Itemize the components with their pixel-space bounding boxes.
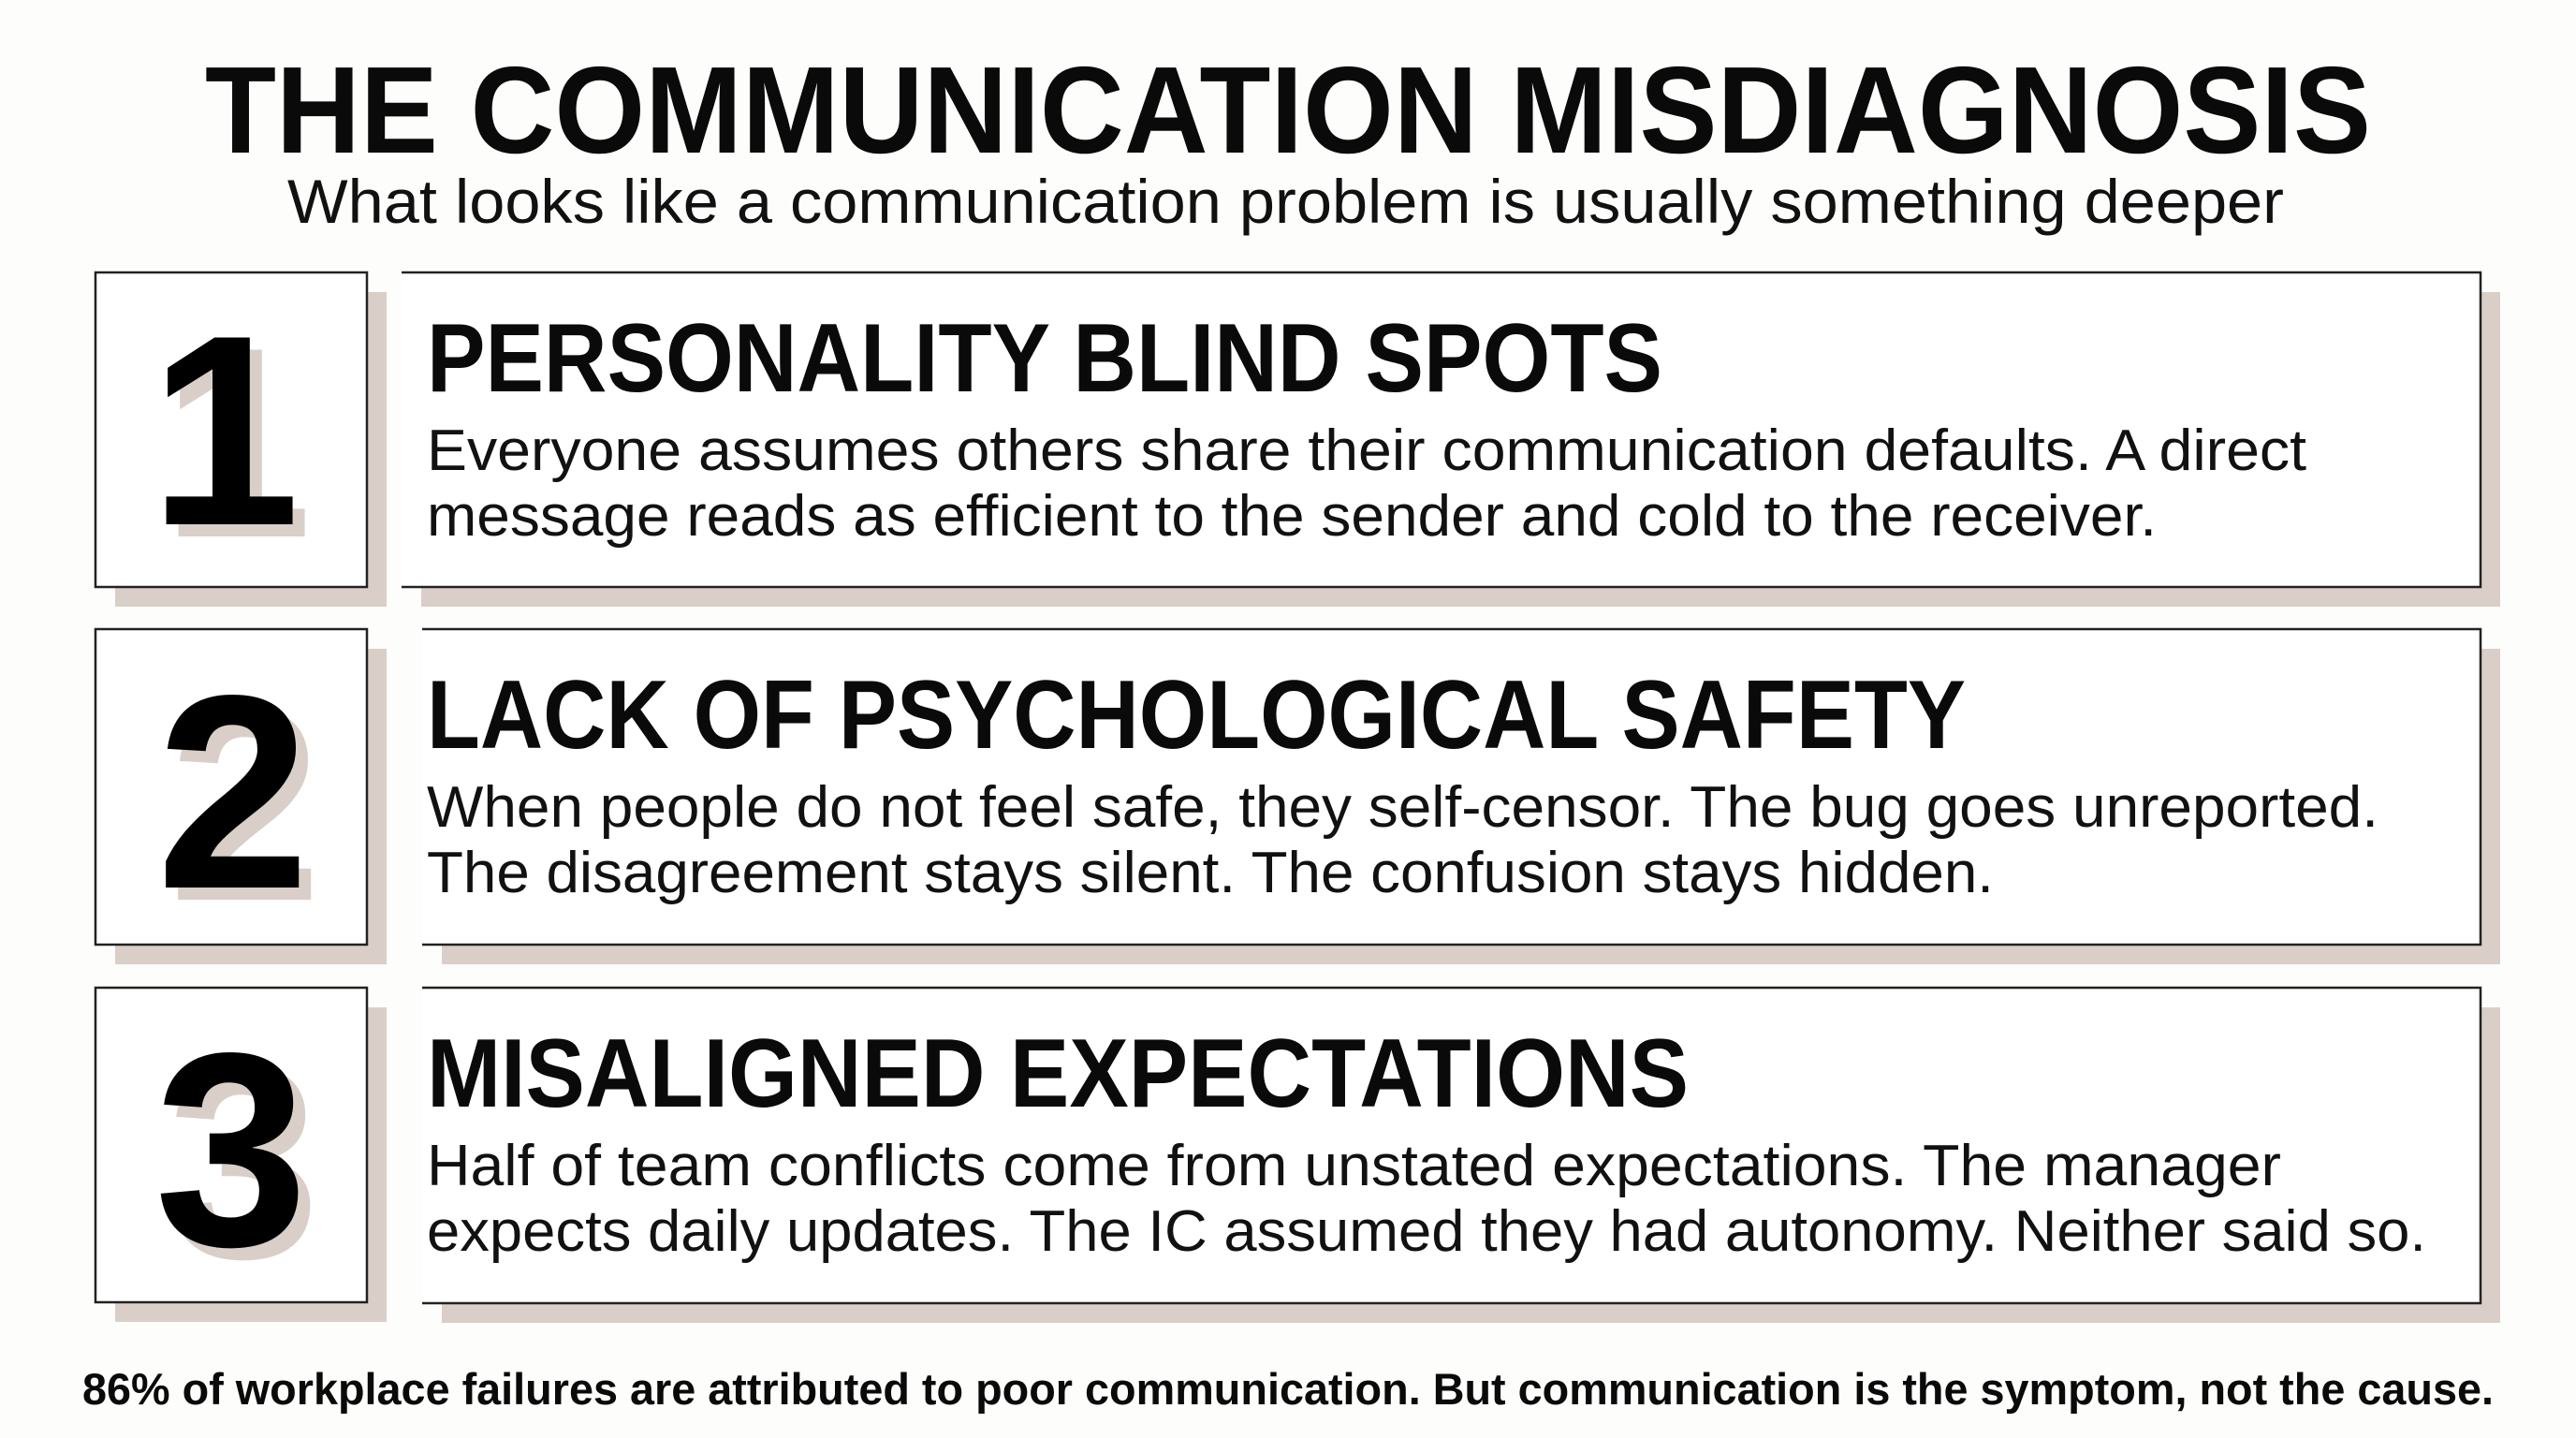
number box 1: 1 <box>161 291 313 594</box>
row 3 <box>95 988 2500 1323</box>
subtitle: What looks like a communication problem is usually something deeper <box>287 167 2284 236</box>
heading 3: MISALIGNED EXPECTATIONS <box>427 1020 1689 1128</box>
number box 3 <box>95 988 387 1322</box>
body 1: Everyone assumes others share their communication defaults. A direct <box>427 418 2306 483</box>
body 3: Half of team conflicts come from unstated expectations. The manager <box>427 1134 2281 1198</box>
number box 2: 2 <box>168 650 322 959</box>
heading 2: LACK OF PSYCHOLOGICAL SAFETY <box>427 661 1966 770</box>
footer: 86% of workplace failures are attributed to poor communication. But communication is the symptom, not the cause. <box>82 1364 2494 1414</box>
panel 2 <box>422 629 2500 964</box>
heading 1: PERSONALITY BLIND SPOTS <box>427 304 1662 413</box>
number box 2: 2 <box>156 638 310 946</box>
panel 3 <box>422 988 2500 1323</box>
row 1 <box>95 272 2500 607</box>
body 3: expects daily updates. The IC assumed they had autonomy. Neither said so. <box>427 1199 2426 1264</box>
body 1: message reads as efficient to the sender and cold to the receiver. <box>427 484 2157 549</box>
panel 1 <box>402 272 2500 607</box>
number box 3: 3 <box>154 995 308 1304</box>
title: THE COMMUNICATION MISDIAGNOSIS <box>205 41 2371 179</box>
number box 3: 3 <box>167 1007 320 1316</box>
number box 1: 1 <box>149 279 300 582</box>
number box 2 <box>95 629 387 964</box>
body 2: The disagreement stays silent. The confusion stays hidden. <box>427 841 1994 905</box>
body 2: When people do not feel safe, they self-censor. The bug goes unreported. <box>427 775 2378 840</box>
number box 1 <box>95 272 387 607</box>
row 2 <box>95 629 2500 964</box>
